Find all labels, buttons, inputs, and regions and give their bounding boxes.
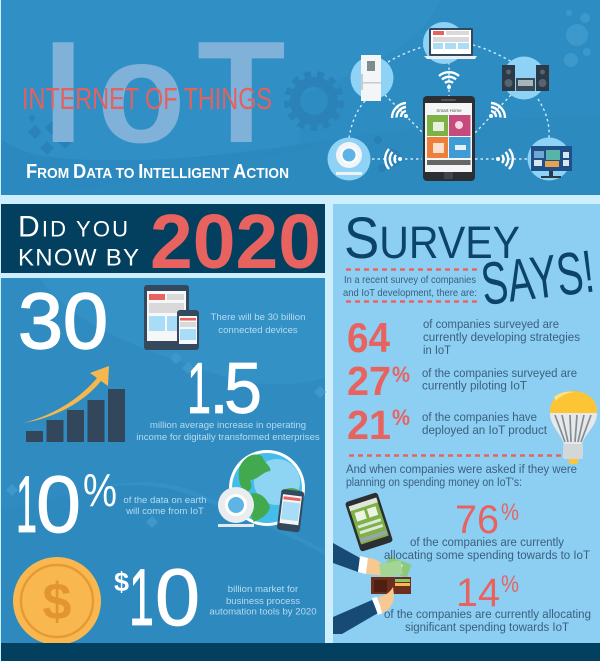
icon: smart TV bbox=[528, 138, 572, 180]
icon: gold dollar coin: $ bbox=[43, 573, 72, 631]
stat: 30 billion devices: 30 bbox=[18, 276, 108, 365]
icon: smartphone with smart home app: Smart Home bbox=[436, 108, 462, 113]
icon: light bulb bbox=[550, 391, 597, 464]
text: survey intro bbox=[343, 275, 477, 299]
stat: 76 percent some spending bbox=[384, 498, 591, 562]
stat: 76 percent some spending: 76 bbox=[455, 498, 499, 542]
title: Internet of Things: INTERNET OF THINGS bbox=[22, 81, 272, 116]
icon: globe webcam and phone bbox=[218, 450, 305, 532]
connection lines bbox=[349, 45, 549, 159]
heading: large IoT letters bbox=[43, 11, 286, 173]
panel: did you know banner bbox=[1, 199, 325, 285]
icon: background gear bbox=[287, 74, 341, 128]
text: business process automation: billion market for bbox=[228, 584, 299, 595]
text: significant spending: significant spending towards IoT bbox=[405, 620, 570, 634]
chart: rising bars with arrow bbox=[23, 366, 125, 442]
text: survey intro: In a recent survey of companies bbox=[344, 275, 476, 286]
heading: survey: SURVEY bbox=[344, 206, 520, 271]
text: deployed bbox=[422, 410, 548, 437]
stat: 10 percent of data: 1 bbox=[16, 460, 37, 550]
stat: 21 percent deployed: 21 bbox=[347, 402, 391, 448]
icon: hand holding wallet with cash bbox=[333, 556, 412, 634]
stat: 1.5 million: . bbox=[209, 349, 229, 429]
icon: hand holding tablet bbox=[333, 492, 393, 576]
text: piloting: currently piloting IoT bbox=[422, 378, 528, 392]
icon: tablet and phone bbox=[144, 285, 199, 350]
stat: 10 percent of data: % bbox=[83, 464, 117, 516]
panel: left statistics bbox=[1, 276, 326, 645]
text: developing strategies: in IoT bbox=[423, 343, 452, 357]
subtitle: From Data to Intelligent Action: FROM DATA TO INTELLIGENT ACTION bbox=[26, 161, 289, 183]
stat: 10 billion market bbox=[13, 553, 317, 645]
icon: laptop bbox=[423, 22, 477, 64]
heading: did you know by bbox=[18, 210, 139, 272]
text: some spending: allocating some spending towards to IoT bbox=[384, 548, 591, 562]
number: 2020: 2020 bbox=[150, 199, 321, 285]
text: piloting bbox=[422, 366, 577, 392]
heading: large IoT letters: T bbox=[197, 11, 286, 173]
text: operating income increase: income for digitally transformed enterprises bbox=[136, 432, 320, 443]
icon: stereo speakers bbox=[502, 56, 549, 100]
stat: 27 percent piloting bbox=[347, 358, 577, 404]
stat: 64 developing strategies bbox=[347, 314, 580, 361]
text: some spending: of the companies are currently bbox=[410, 535, 565, 549]
stat: 10 percent of data bbox=[16, 450, 305, 550]
text: developing strategies: currently developing strategies bbox=[423, 330, 580, 344]
stat: 1.5 million: 5 bbox=[224, 349, 262, 429]
text: piloting: of the companies surveyed are bbox=[422, 366, 577, 380]
text: data on earth: of the data on earth bbox=[123, 495, 207, 506]
stat: 76 percent some spending: % bbox=[501, 499, 519, 526]
footer bar bbox=[1, 643, 600, 661]
icon: gold dollar coin bbox=[13, 557, 101, 645]
stat: 10 billion market: 1 bbox=[129, 553, 154, 643]
stat: 64 developing strategies: 64 bbox=[347, 314, 391, 361]
icon: smartphone with smart home app bbox=[423, 96, 475, 181]
stat: 14 percent significant spending: 14 bbox=[456, 571, 500, 615]
heading: did you know by: DID YOU bbox=[18, 210, 128, 244]
text: some spending bbox=[384, 535, 591, 562]
heading: large IoT letters: o bbox=[97, 11, 186, 173]
text: data on earth: will come from IoT bbox=[125, 506, 204, 517]
stat: 14 percent significant spending: % bbox=[501, 571, 519, 598]
icon: webcam bbox=[328, 138, 370, 180]
text: spending question: And when companies were asked if they were bbox=[346, 462, 577, 476]
text: business process automation: business process bbox=[226, 596, 300, 607]
text: survey intro: and IoT development, there are: bbox=[343, 288, 477, 299]
stat: 1.5 million bbox=[23, 349, 320, 443]
stat: 10 billion market: 0 bbox=[155, 553, 200, 643]
heading: large IoT letters: I bbox=[43, 11, 83, 173]
text: 30 billion connected devices: There will be 30 billion bbox=[211, 312, 305, 323]
stat: 21 percent deployed: % bbox=[392, 405, 410, 430]
stat: 21 percent deployed bbox=[347, 402, 548, 448]
icon: wifi signals bbox=[385, 72, 513, 169]
text: significant spending bbox=[384, 607, 591, 634]
stat: 10 percent of data: 0 bbox=[36, 460, 81, 550]
text: developing strategies: of companies surveyed are bbox=[423, 317, 559, 331]
text: operating income increase: million average increase in operating bbox=[150, 420, 306, 431]
stat: 10 billion market: $ bbox=[114, 567, 129, 597]
text: deployed: deployed an IoT product bbox=[422, 423, 548, 437]
panel: survey says bbox=[333, 204, 600, 643]
text: spending question: planning on spending money on IoT's: bbox=[346, 475, 522, 489]
stat: 1.5 million: 1 bbox=[187, 349, 211, 429]
panel: header bbox=[1, 0, 600, 195]
text: developing strategies bbox=[423, 317, 580, 357]
text: significant spending: of the companies are currently allocating bbox=[384, 607, 591, 621]
stat: 27 percent piloting: % bbox=[392, 362, 410, 387]
heading: did you know by: KNOW BY bbox=[18, 244, 139, 272]
text: 30 billion connected devices: connected devices bbox=[218, 325, 298, 336]
stat: 27 percent piloting: 27 bbox=[347, 358, 391, 404]
stat: 30 billion devices bbox=[18, 276, 305, 365]
text: deployed: of the companies have bbox=[422, 410, 537, 424]
stat: 14 percent significant spending bbox=[384, 571, 591, 634]
text: spending question bbox=[346, 462, 577, 489]
icon: fridge bbox=[350, 55, 394, 101]
text: business process automation: automation tools by 2020 bbox=[209, 606, 317, 618]
